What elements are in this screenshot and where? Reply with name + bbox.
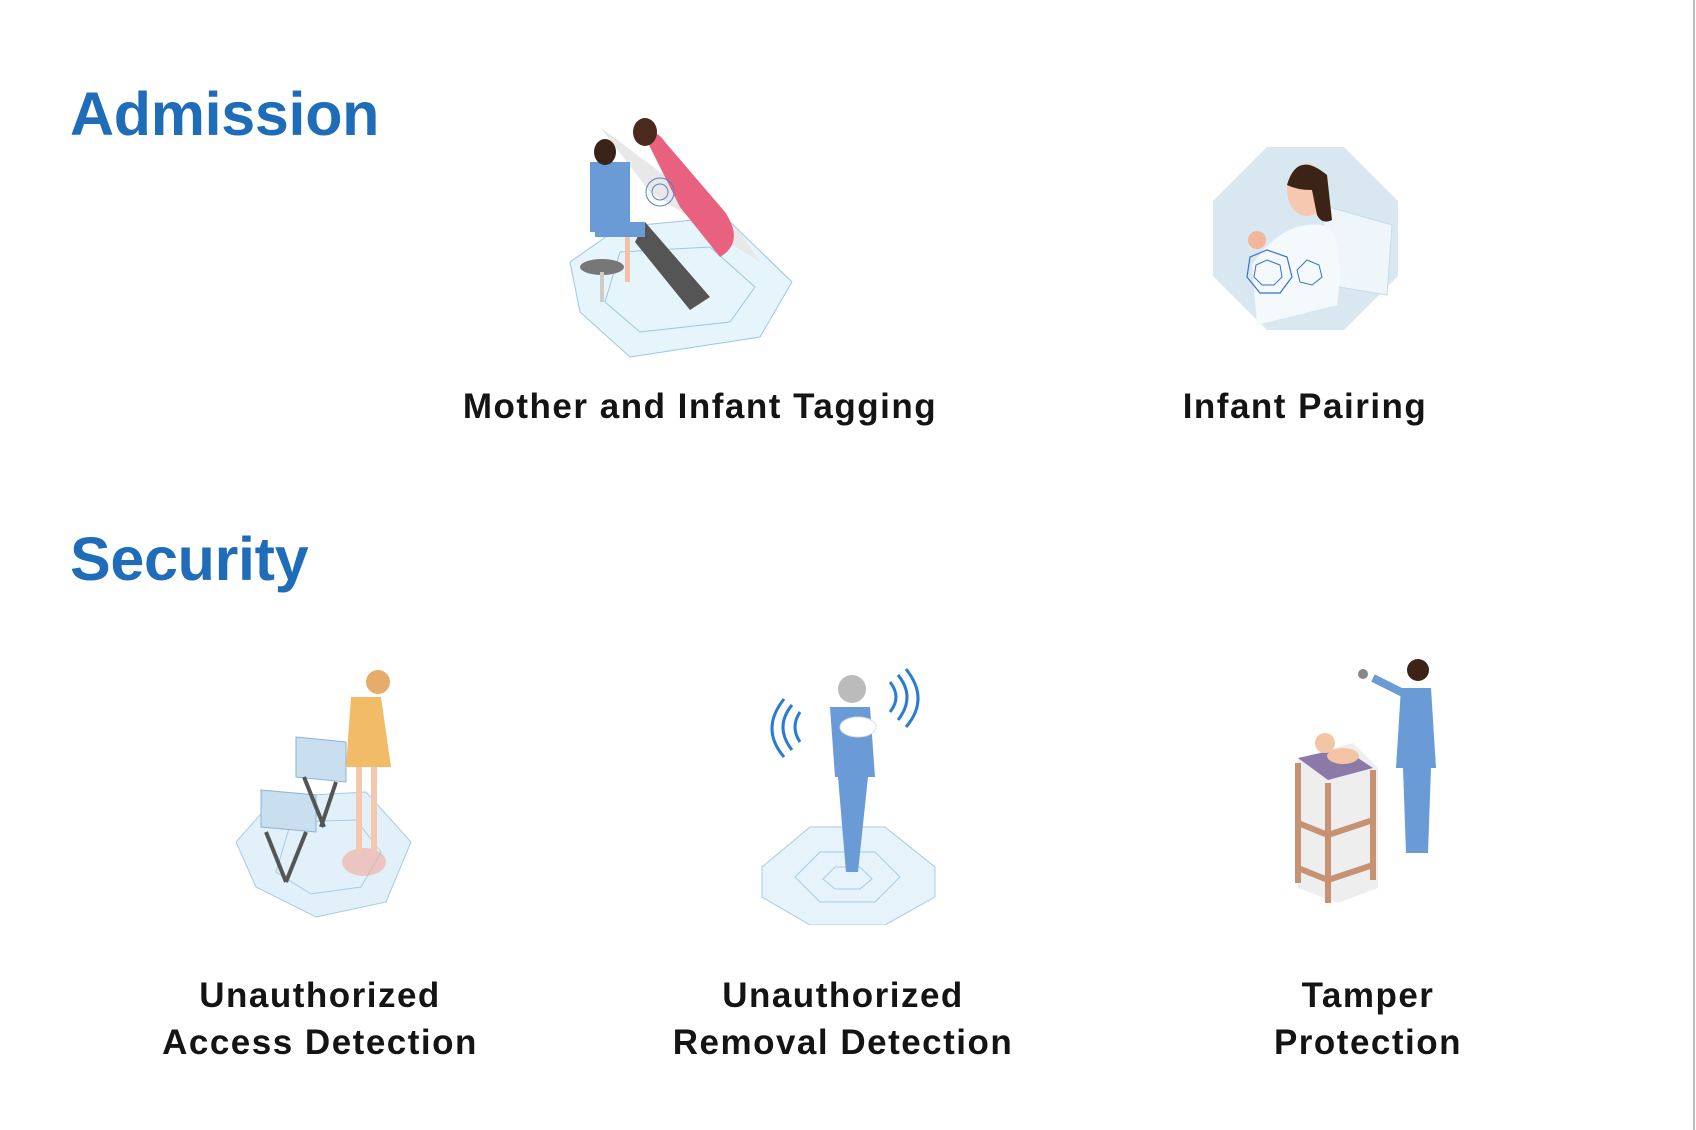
illustration: unauthorized removal detection (762, 668, 936, 925)
right border line (1693, 0, 1695, 1130)
illustration: mother and infant tagging (570, 118, 792, 358)
label: Tamper Protection: Protection (1274, 1023, 1462, 1062)
label: Unauthorized Access Detection (162, 976, 478, 1062)
label: Tamper Protection: Tamper (1302, 976, 1434, 1015)
heading: Admission: Admission (70, 80, 379, 148)
illustration: infant pairing (1213, 147, 1398, 330)
illustration: tamper protection (1295, 659, 1436, 903)
label: Unauthorized Removal Detection (673, 976, 1013, 1062)
label: Mother and Infant Tagging: Mother and Infant Tagging (463, 387, 937, 426)
label: Tamper Protection (1274, 976, 1462, 1062)
label: Unauthorized Removal Detection: Removal Detection (673, 1023, 1013, 1062)
label: Infant Pairing: Infant Pairing (1183, 387, 1427, 426)
label: Unauthorized Access Detection: Unauthorized (199, 976, 441, 1015)
heading: Security: Security (70, 525, 308, 593)
label: Unauthorized Access Detection: Access Detection (162, 1023, 478, 1062)
illustration: unauthorized access detection (236, 670, 412, 918)
label: Unauthorized Removal Detection: Unauthorized (722, 976, 964, 1015)
